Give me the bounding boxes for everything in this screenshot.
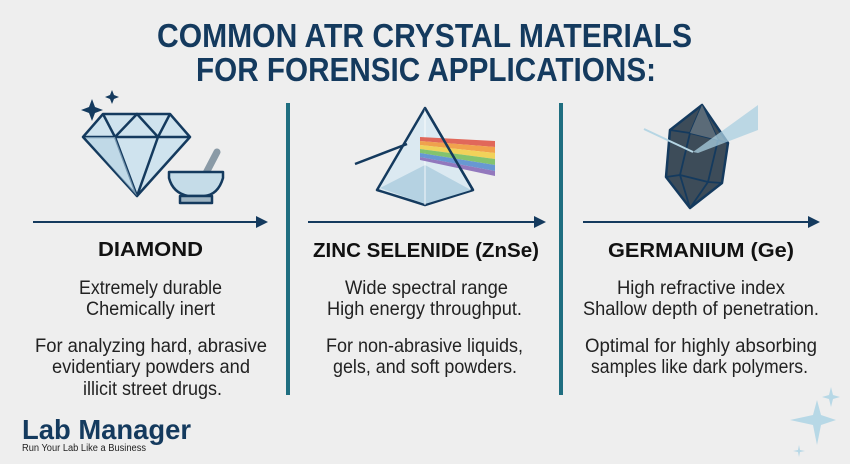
text: germanium properties: Shallow depth of penetration. — [583, 299, 819, 320]
panel: diamond — [33, 90, 268, 400]
icon: sparkles bottom right — [790, 387, 840, 457]
divider 1 — [286, 103, 290, 395]
divider 2 — [559, 103, 563, 395]
arrow — [33, 216, 268, 228]
title: FOR FORENSIC APPLICATIONS: — [196, 51, 656, 88]
heading: germanium: GERMANIUM (Ge) — [608, 240, 794, 262]
heading: diamond: DIAMOND — [98, 239, 203, 261]
logo: Lab Manager: Lab Manager — [22, 414, 191, 445]
text: diamond properties: evidentiary powders and — [52, 357, 250, 378]
text: znse properties: gels, and soft powders. — [333, 357, 517, 378]
text: germanium properties: Optimal for highly absorbing — [585, 336, 817, 357]
heading: zinc selenide: ZINC SELENIDE (ZnSe) — [313, 240, 539, 262]
text: diamond properties — [35, 278, 267, 400]
text: germanium properties: samples like dark polymers. — [591, 357, 808, 378]
text: znse properties: For non-abrasive liquids, — [326, 336, 523, 357]
title — [157, 17, 692, 88]
icon: diamond with sparkles and mortar — [81, 90, 223, 203]
logo: Lab Manager: Run Your Lab Like a Business — [22, 443, 146, 454]
text: znse properties — [326, 278, 523, 378]
arrow — [583, 216, 820, 228]
icon: prism with rainbow — [355, 108, 495, 205]
text: diamond properties: Extremely durable — [79, 278, 222, 299]
title: COMMON ATR CRYSTAL MATERIALS — [157, 17, 692, 54]
text: germanium properties: High refractive index — [617, 278, 785, 299]
text: germanium properties — [583, 278, 819, 378]
icon: germanium crystal with beam — [644, 105, 758, 208]
arrow — [308, 216, 546, 228]
text: diamond properties: Chemically inert — [86, 299, 216, 320]
panel: germanium — [583, 105, 820, 378]
text: znse properties: Wide spectral range — [345, 278, 508, 299]
text: diamond properties: For analyzing hard, abrasive — [35, 336, 267, 357]
text: diamond properties: illicit street drugs. — [83, 379, 222, 400]
text: znse properties: High energy throughput. — [327, 299, 522, 320]
panel: zinc selenide — [308, 108, 546, 378]
